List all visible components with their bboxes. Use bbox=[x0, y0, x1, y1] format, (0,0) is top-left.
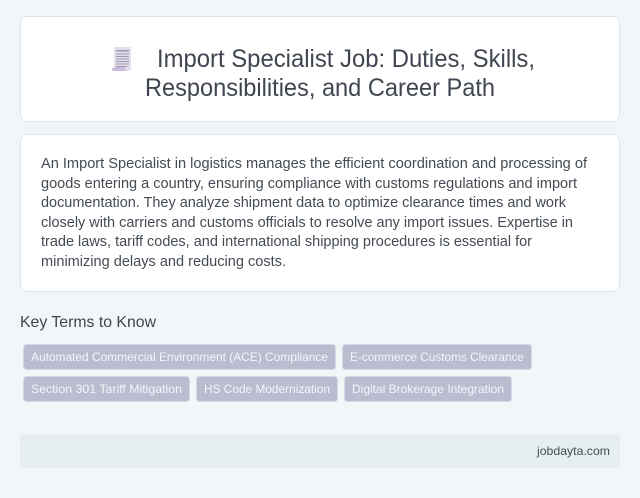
tag: HS code bbox=[196, 376, 338, 402]
tag: section 301 bbox=[24, 376, 190, 402]
tag: HS code: HS Code Modernization bbox=[204, 382, 330, 396]
icon: document scroll bbox=[112, 47, 131, 71]
tag: digital brokerage bbox=[344, 376, 512, 402]
text block: description: minimizing delays and reducing costs. bbox=[41, 254, 286, 270]
panel: description bbox=[20, 134, 620, 292]
tag: ACE compliance bbox=[24, 344, 336, 370]
tag: ACE compliance: Automated Commercial Environment (ACE) Compliance bbox=[31, 350, 328, 364]
footer bar bbox=[20, 434, 620, 468]
tag: e-commerce customs bbox=[342, 344, 532, 370]
footer: source: jobdayta.com bbox=[536, 444, 610, 458]
text block: description: documentation. They analyze shipment data to optimize clearance times and work bbox=[41, 195, 567, 211]
text block: description: goods entering a country, ensuring compliance with customs regulations and import bbox=[41, 176, 577, 192]
text block: description: closely with carriers and customs officials to resolve any import issues. Expertise in bbox=[41, 215, 573, 231]
panel: title card bbox=[20, 16, 620, 122]
text block: description: trade laws, tariff codes, and international shipping procedures is essential for bbox=[41, 234, 532, 250]
title: Import Specialist Job: Duties, Skills, bbox=[157, 45, 535, 73]
title bbox=[145, 45, 535, 102]
title: Responsibilities, and Career Path bbox=[145, 74, 495, 102]
tag: section 301: Section 301 Tariff Mitigation bbox=[31, 382, 182, 396]
tag: e-commerce customs: E-commerce Customs Clearance bbox=[350, 350, 524, 364]
tag: digital brokerage: Digital Brokerage Integration bbox=[352, 382, 504, 396]
text block: description: An Import Specialist in logistics manages the efficient coordination and processing of bbox=[41, 156, 588, 172]
text block: description bbox=[41, 156, 588, 270]
tags: key terms bbox=[24, 344, 532, 402]
heading: key terms: Key Terms to Know bbox=[20, 314, 156, 331]
